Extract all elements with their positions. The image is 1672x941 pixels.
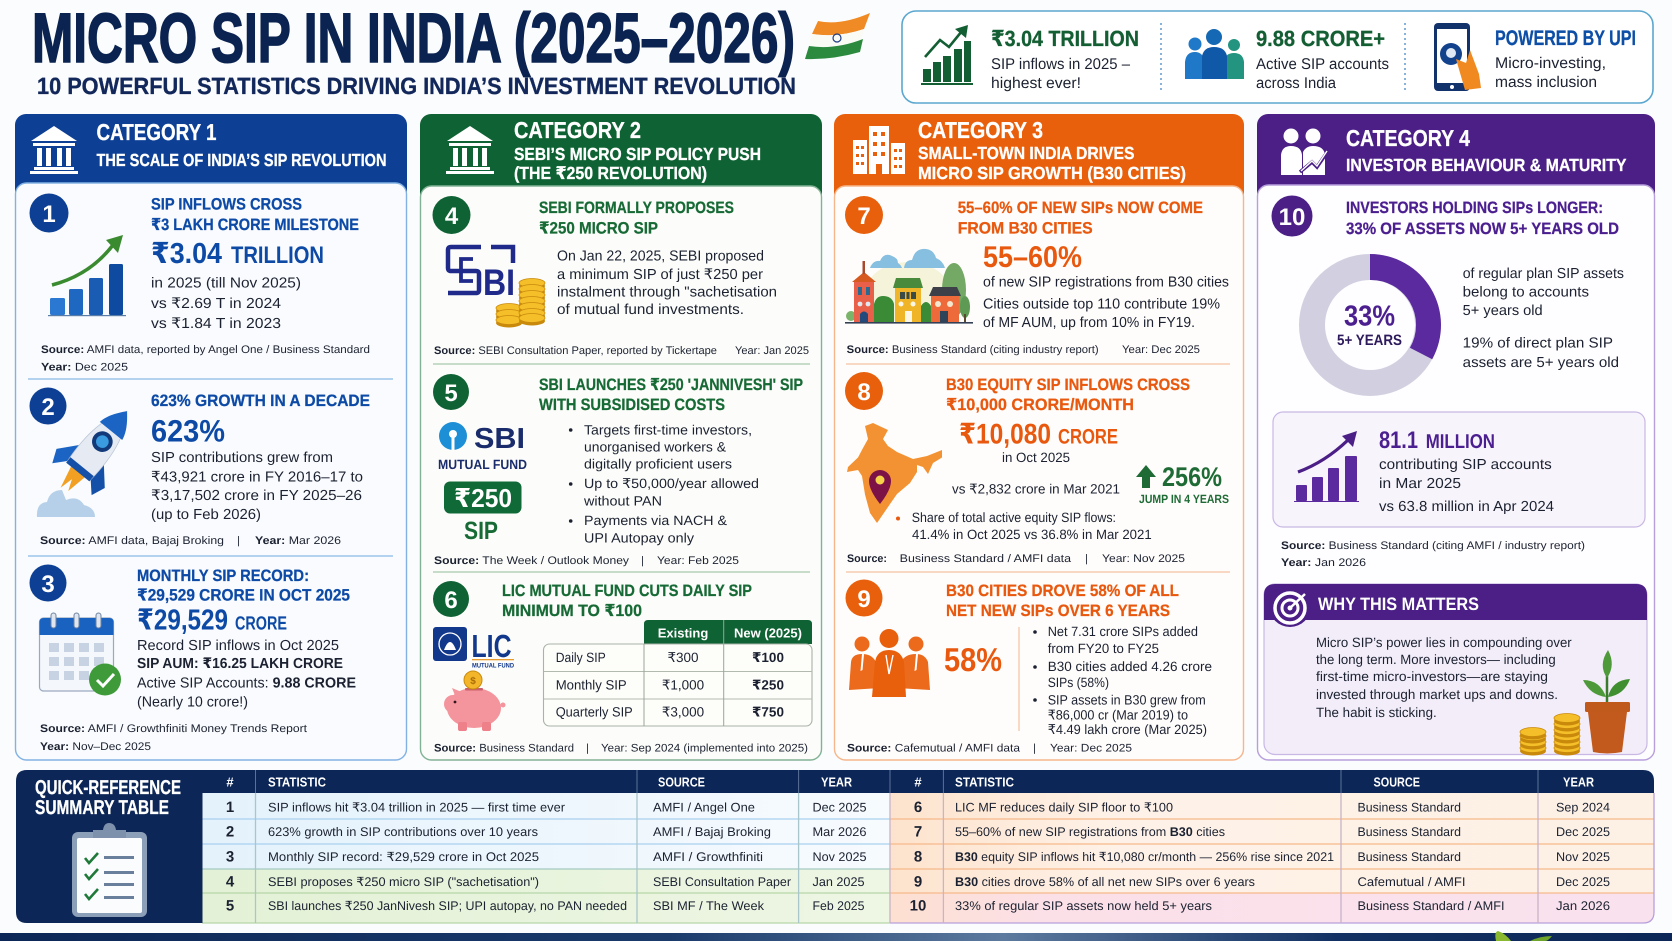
stat 6: LIC MUTUAL FUND CUTS DAILY SIP bbox=[502, 582, 752, 600]
category 2 header: (THE ₹250 REVOLUTION) bbox=[514, 163, 707, 183]
stat 3: 3 bbox=[41, 571, 55, 598]
card: contributing accounts: vs 63.8 million in Apr 2024 bbox=[1379, 499, 1554, 515]
icon: people group bbox=[1185, 29, 1244, 79]
rows 6 to 10: B30 cities drove 58% of all net new SIPs over 6 years bbox=[955, 875, 1255, 889]
stat 7: of new SIP registrations from B30 cities bbox=[983, 274, 1229, 290]
stat 8: CRORE bbox=[1058, 426, 1118, 448]
category 4 header: CATEGORY 4 bbox=[1346, 125, 1470, 151]
stat 8: | bbox=[1085, 553, 1088, 565]
stat: powered by UPI: Micro-investing, bbox=[1495, 55, 1606, 72]
category 4 header bbox=[1257, 114, 1655, 204]
stat: active accounts: across India bbox=[1256, 75, 1336, 92]
stat 8: vs ₹2,832 crore in Mar 2021 bbox=[952, 482, 1120, 496]
icon: piggy bank bbox=[444, 671, 506, 731]
stat 3: Source: AMFI / Growthfiniti Money Trends Report bbox=[40, 723, 307, 735]
rows 6 to 10: 6 bbox=[914, 799, 922, 816]
stat 7: Cities outside top 110 contribute 19% bbox=[983, 296, 1220, 312]
rows 1 to 5: 3 bbox=[226, 848, 234, 866]
stat 10: 10 bbox=[1279, 204, 1305, 231]
stat 2: Source: AMFI data, Bajaj Broking bbox=[40, 535, 224, 547]
bullet list: SIPs (58%) bbox=[1048, 675, 1109, 690]
stat 2: SIP contributions grew from bbox=[151, 450, 333, 466]
stat 1 bbox=[30, 194, 370, 374]
bullet list: Net 7.31 crore SIPs added bbox=[1048, 624, 1198, 639]
stat 6: | bbox=[586, 742, 589, 754]
stat 4: SEBI FORMALLY PROPOSES bbox=[539, 199, 734, 217]
icon: SEBI logo with coins: BI bbox=[483, 262, 515, 303]
donut chart: 33%: 33% bbox=[1344, 300, 1395, 332]
stat 5: SBI LAUNCHES ₹250 'JANNIVESH' SIP bbox=[539, 376, 803, 394]
rows 1 to 5: Mar 2026 bbox=[812, 825, 867, 839]
donut description: of regular plan SIP assets bbox=[1463, 266, 1624, 282]
subtitle: 10 POWERFUL STATISTICS DRIVING INDIA’S INVESTMENT REVOLUTION bbox=[37, 73, 796, 99]
stat 10: Year: Jan 2026 bbox=[1281, 557, 1366, 569]
stat 4: ₹250 MICRO SIP bbox=[539, 220, 658, 238]
callout: why this matters: invested through market ups and downs. bbox=[1316, 687, 1558, 702]
stat 8: in Oct 2025 bbox=[1002, 450, 1070, 465]
icon: target bbox=[1269, 585, 1311, 627]
icon: SEBI logo with coins bbox=[448, 247, 545, 328]
stat 4 bbox=[432, 196, 809, 357]
stat 9: | bbox=[1033, 742, 1036, 754]
icon: SBI mutual fund logo: SBI bbox=[474, 423, 525, 455]
stat 2: 623% bbox=[151, 414, 225, 448]
stat 7: 55–60% bbox=[983, 241, 1082, 274]
bullet list: B30 cities added 4.26 crore bbox=[1048, 659, 1212, 674]
icon: bank bbox=[30, 126, 78, 174]
stat 9: NET NEW SIPs OVER 6 YEARS bbox=[946, 602, 1170, 620]
rows 6 to 10: Business Standard bbox=[1358, 825, 1461, 839]
stat 6: Source: Business Standard bbox=[434, 742, 574, 754]
bullet list: without PAN bbox=[583, 494, 662, 508]
stat 8: 41.4% in Oct 2025 vs 36.8% in Mar 2021 bbox=[912, 527, 1152, 542]
bullet list bbox=[1033, 624, 1212, 737]
donut description: 19% of direct plan SIP bbox=[1463, 336, 1613, 352]
donut description: assets are 5+ years old bbox=[1463, 355, 1619, 371]
stat 8: Year: Nov 2025 bbox=[1102, 553, 1185, 565]
donut chart: 33% bbox=[1312, 254, 1441, 383]
stat 1: ₹3 LAKH CRORE MILESTONE bbox=[151, 216, 359, 234]
rows 6 to 10: Cafemutual / AMFI bbox=[1358, 875, 1466, 889]
stat 9: 58% bbox=[944, 641, 1002, 678]
stat 5: Year: Feb 2025 bbox=[657, 555, 739, 567]
stat 8: ₹10,000 CRORE/MONTH bbox=[946, 396, 1134, 414]
stat 3: Record SIP inflows in Oct 2025 bbox=[137, 638, 339, 654]
icon: plant in pot bbox=[1583, 650, 1630, 754]
stat 3: ₹29,529 bbox=[137, 604, 228, 636]
icon: calendar with check bbox=[40, 613, 121, 696]
rows 1 to 5: AMFI / Bajaj Broking bbox=[653, 825, 771, 839]
rows 1 to 5: Feb 2025 bbox=[812, 899, 865, 913]
stat: SIP inflows: ₹3.04 TRILLION bbox=[991, 26, 1139, 51]
table: LIC minimum amounts: ₹1,000 bbox=[662, 678, 704, 692]
category 1 header: CATEGORY 1 bbox=[96, 119, 217, 145]
stat 3: MONTHLY SIP RECORD: bbox=[137, 567, 309, 585]
rows 6 to 10: 9 bbox=[914, 874, 922, 890]
stat 3: Active SIP Accounts: 9.88 CRORE bbox=[137, 676, 356, 692]
table: LIC minimum amounts: ₹100 bbox=[752, 650, 784, 665]
bullet list bbox=[569, 422, 759, 546]
stat 2: 623% GROWTH IN A DECADE bbox=[151, 392, 370, 410]
callout: why this matters: the long term. More investors— including bbox=[1316, 652, 1556, 667]
icon: piggy bank: $ bbox=[470, 676, 476, 687]
stat 8: ₹10,080 bbox=[959, 418, 1051, 450]
rows 6 to 10: Nov 2025 bbox=[1556, 850, 1610, 864]
rows 1 to 5: Dec 2025 bbox=[812, 800, 867, 814]
stat 5: 5 bbox=[444, 380, 458, 407]
stat 7: 7 bbox=[857, 203, 871, 230]
bullet list: UPI Autopay only bbox=[584, 530, 694, 546]
icon: SBI mutual fund logo bbox=[438, 422, 527, 472]
card: contributing accounts bbox=[1273, 412, 1645, 527]
stat 4: Year: Jan 2025 bbox=[735, 345, 809, 357]
stat 7: 55–60% OF NEW SIPs NOW COME bbox=[958, 199, 1203, 217]
bullet list: ₹86,000 cr (Mar 2019) to bbox=[1048, 708, 1188, 722]
stat 10: Source: Business Standard (citing AMFI / industry report) bbox=[1281, 540, 1585, 552]
category 2 body bbox=[420, 186, 822, 760]
stat 1: in 2025 (till Nov 2025) bbox=[151, 276, 301, 292]
rows 1 to 5: Nov 2025 bbox=[812, 850, 867, 864]
header labels: # bbox=[226, 774, 234, 790]
title: MICRO SIP IN INDIA (2025–2026) bbox=[32, 0, 795, 77]
table: LIC minimum amounts: ₹3,000 bbox=[662, 704, 704, 720]
callout: 256% jump: JUMP IN 4 YEARS bbox=[1139, 492, 1229, 506]
icon: LIC logo bbox=[433, 627, 514, 670]
category 2 header: CATEGORY 2 bbox=[514, 117, 641, 143]
stat 5: | bbox=[641, 555, 644, 567]
header labels: # bbox=[914, 774, 922, 790]
rows 6 to 10: Dec 2025 bbox=[1556, 825, 1610, 839]
rows 1 to 5: 1 bbox=[226, 799, 234, 816]
category 3 header: SMALL-TOWN INDIA DRIVES bbox=[918, 143, 1134, 163]
stat 9 bbox=[846, 580, 1212, 754]
quick reference left block: QUICK-REFERENCE bbox=[35, 777, 181, 799]
badge: 250 SIP bbox=[444, 482, 522, 545]
rows 1 to 5: AMFI / Angel One bbox=[653, 800, 755, 814]
stat 1: Source: AMFI data, reported by Angel One / Business Standard bbox=[41, 344, 370, 356]
rows 1 to 5: SBI launches ₹250 JanNivesh SIP; UPI autopay, no PAN needed bbox=[268, 899, 627, 913]
category 1 header: THE SCALE OF INDIA’S SIP REVOLUTION bbox=[96, 150, 386, 170]
stat 2: ₹43,921 crore in FY 2016–17 to bbox=[151, 470, 363, 486]
icon: small town illustration bbox=[845, 249, 973, 324]
donut chart: 33%: 5+ YEARS bbox=[1337, 332, 1402, 349]
table: LIC minimum amounts bbox=[544, 620, 812, 726]
stat 6: Year: Sep 2024 (implemented into 2025) bbox=[601, 742, 808, 754]
category 3 header: MICRO SIP GROWTH (B30 CITIES) bbox=[918, 163, 1186, 183]
icon: phone with UPI bbox=[1434, 23, 1481, 91]
icon: investors with rising chart bbox=[1281, 128, 1328, 175]
stat: active accounts bbox=[1256, 26, 1389, 92]
table: LIC minimum amounts: Quarterly SIP bbox=[556, 704, 633, 720]
category 4 header: INVESTOR BEHAVIOUR & MATURITY bbox=[1346, 155, 1627, 175]
icon: India flag bbox=[805, 13, 870, 59]
category 3 header: CATEGORY 3 bbox=[918, 117, 1043, 143]
icon: coins bbox=[1520, 714, 1580, 756]
stat 3: Year: Nov–Dec 2025 bbox=[40, 741, 151, 753]
stat 3: (Nearly 10 crore!) bbox=[137, 694, 248, 710]
icon: LIC logo: MUTUAL FUND bbox=[472, 662, 514, 670]
rows 1 to 5: AMFI / Growthfiniti bbox=[653, 850, 763, 864]
stat 10 bbox=[1272, 196, 1645, 569]
rows 1 to 5 bbox=[226, 799, 867, 914]
bullet list: from FY20 to FY25 bbox=[1048, 641, 1159, 656]
stat 8: Share of total active equity SIP flows: bbox=[912, 510, 1116, 525]
stat 4: instalment through "sachetisation bbox=[557, 284, 777, 300]
panel: top key stats bbox=[902, 11, 1653, 103]
stat 2: | bbox=[237, 535, 240, 547]
stat: active accounts: 9.88 CRORE+ bbox=[1256, 26, 1385, 51]
stat 4: 4 bbox=[445, 203, 459, 230]
rows 6 to 10: 8 bbox=[914, 848, 922, 866]
stat 1: 1 bbox=[42, 201, 56, 228]
bullet list: Targets first-time investors, bbox=[584, 422, 752, 438]
panel: quick-reference summary table bbox=[16, 770, 1654, 923]
icon: bar chart with arrow bbox=[48, 235, 126, 316]
stat 8: 8 bbox=[857, 379, 871, 406]
header labels: YEAR bbox=[1563, 774, 1595, 790]
bullet list: ₹4.49 lakh crore (Mar 2025) bbox=[1048, 722, 1207, 737]
category 2 header bbox=[420, 114, 822, 204]
badge: 250 SIP: ₹250 bbox=[454, 483, 512, 513]
rows 6 to 10: LIC MF reduces daily SIP floor to ₹100 bbox=[955, 800, 1173, 814]
quick reference left block: SUMMARY TABLE bbox=[35, 797, 169, 819]
stat 9: Source: Cafemutual / AMFI data bbox=[847, 742, 1021, 754]
donut description: 5+ years old bbox=[1463, 303, 1543, 319]
rows 1 to 5: SIP inflows hit ₹3.04 trillion in 2025 — first time ever bbox=[268, 800, 565, 814]
icon: city buildings bbox=[853, 126, 905, 174]
rows 1 to 5: Jan 2025 bbox=[812, 875, 865, 889]
bullet list: digitally proficient users bbox=[584, 456, 732, 472]
stat 10: INVESTORS HOLDING SIPs LONGER: bbox=[1346, 199, 1603, 217]
stat 5 bbox=[433, 374, 803, 567]
category 3 body bbox=[834, 186, 1244, 760]
stat 1: SIP INFLOWS CROSS bbox=[151, 196, 302, 214]
stat 6 bbox=[433, 581, 812, 754]
stat 2 bbox=[30, 388, 370, 547]
stat 5: Source: The Week / Outlook Money bbox=[434, 555, 630, 567]
stat 10: 33% OF ASSETS NOW 5+ YEARS OLD bbox=[1346, 220, 1619, 238]
card: contributing accounts: in Mar 2025 bbox=[1379, 476, 1461, 492]
icon: purple growth chart bbox=[1294, 431, 1359, 502]
stat: SIP inflows bbox=[991, 26, 1139, 92]
stat 7: FROM B30 CITIES bbox=[958, 220, 1093, 238]
category 2 header: SEBI’S MICRO SIP POLICY PUSH bbox=[514, 144, 761, 164]
rows 6 to 10: Jan 2026 bbox=[1556, 899, 1610, 913]
stat 4: of mutual fund investments. bbox=[557, 302, 744, 318]
rows 6 to 10: 10 bbox=[910, 898, 926, 914]
category 3 header bbox=[834, 114, 1244, 204]
stat 6: MINIMUM TO ₹100 bbox=[502, 602, 642, 620]
table: LIC minimum amounts: New (2025) bbox=[734, 626, 802, 640]
icon: LIC logo: LIC bbox=[472, 628, 512, 664]
stat 1: ₹3.04 bbox=[151, 238, 222, 270]
bullet list: Up to ₹50,000/year allowed bbox=[584, 476, 759, 491]
stat 2: (up to Feb 2026) bbox=[151, 507, 261, 523]
stat 3: SIP AUM: ₹16.25 LAKH CRORE bbox=[137, 656, 343, 672]
panel: category 2 bbox=[420, 114, 822, 760]
stat 6: 6 bbox=[444, 587, 458, 614]
quick reference left block bbox=[16, 770, 202, 923]
stat 7: of MF AUM, up from 10% in FY19. bbox=[983, 315, 1195, 331]
table: LIC minimum amounts: ₹250 bbox=[752, 678, 784, 692]
panel: category 3 bbox=[834, 114, 1244, 760]
header labels bbox=[226, 770, 1595, 793]
category 1 body bbox=[16, 183, 406, 760]
stat 3 bbox=[30, 564, 356, 753]
stat 2: 2 bbox=[41, 394, 55, 421]
stat 4: Source: SEBI Consultation Paper, reported by Tickertape bbox=[434, 345, 717, 357]
stat 2: Year: Mar 2026 bbox=[255, 535, 341, 547]
stat 8 bbox=[845, 372, 1229, 565]
icon: bank bbox=[446, 126, 494, 174]
stat 7: Year: Dec 2025 bbox=[1122, 344, 1200, 356]
callout: 256% jump: 256% bbox=[1162, 462, 1222, 492]
donut description: belong to accounts bbox=[1463, 284, 1589, 300]
stat 1: Year: Dec 2025 bbox=[41, 362, 128, 374]
row backgrounds bbox=[202, 793, 1654, 923]
rows 6 to 10: Dec 2025 bbox=[1556, 875, 1610, 889]
card: contributing accounts: 81.1 bbox=[1379, 427, 1418, 454]
icon: clipboard checklist bbox=[72, 823, 147, 917]
category 1 header bbox=[15, 114, 407, 204]
rows 1 to 5: 5 bbox=[226, 898, 234, 914]
panel: category 4 bbox=[1257, 114, 1655, 760]
stat 9: B30 CITIES DROVE 58% OF ALL bbox=[946, 582, 1179, 600]
callout: why this matters: Micro SIP’s power lies in compounding over bbox=[1316, 635, 1572, 650]
rows 1 to 5: 2 bbox=[226, 824, 234, 840]
callout: why this matters: first-time micro-investors—are staying bbox=[1316, 669, 1548, 684]
stat 4: a minimum SIP of just ₹250 per bbox=[557, 267, 763, 283]
rows 1 to 5: Monthly SIP record: ₹29,529 crore in Oct 2025 bbox=[268, 850, 539, 864]
stat 3: CRORE bbox=[235, 614, 287, 634]
bottom band bbox=[0, 931, 1672, 941]
row lines bbox=[202, 793, 1654, 923]
stat 1: TRILLION bbox=[231, 242, 324, 269]
icon: group of people bbox=[849, 629, 930, 697]
header labels: STATISTIC bbox=[268, 774, 327, 790]
stat: powered by UPI: mass inclusion bbox=[1495, 74, 1597, 91]
stat 5: WITH SUBSIDISED COSTS bbox=[539, 396, 725, 414]
icon: rocket bbox=[37, 392, 151, 517]
bullet list: unorganised workers & bbox=[584, 440, 726, 454]
callout: why this matters bbox=[1264, 584, 1647, 756]
stat 8: Business Standard / AMFI data bbox=[900, 553, 1072, 565]
card: contributing accounts: contributing SIP accounts bbox=[1379, 457, 1552, 473]
rows 1 to 5: SBI MF / The Week bbox=[653, 899, 765, 913]
card: contributing accounts: MILLION bbox=[1426, 431, 1495, 453]
rows 1 to 5: 4 bbox=[226, 874, 235, 890]
header labels: SOURCE bbox=[658, 774, 705, 790]
rows 6 to 10: B30 equity SIP inflows hit ₹10,080 cr/month — 256% rise since 2021 bbox=[955, 850, 1334, 864]
table: LIC minimum amounts: Existing bbox=[658, 626, 708, 640]
rows 6 to 10: 7 bbox=[914, 824, 922, 840]
stat 1: vs ₹2.69 T in 2024 bbox=[151, 296, 281, 312]
stat 8: B30 EQUITY SIP INFLOWS CROSS bbox=[946, 376, 1190, 394]
stat 1: vs ₹1.84 T in 2023 bbox=[151, 316, 281, 332]
bullet list: Payments via NACH & bbox=[584, 513, 727, 528]
rows 1 to 5: SEBI proposes ₹250 micro SIP ("sachetisation") bbox=[268, 875, 539, 889]
rows 6 to 10: Sep 2024 bbox=[1556, 800, 1610, 814]
header labels: SOURCE bbox=[1374, 774, 1420, 790]
icon: SBI mutual fund logo: MUTUAL FUND bbox=[438, 457, 527, 472]
icon: green growth chart bbox=[921, 25, 973, 85]
table: LIC minimum amounts: Monthly SIP bbox=[556, 678, 627, 692]
callout: why this matters: The habit is sticking. bbox=[1316, 705, 1437, 720]
stat 3: ₹29,529 CRORE IN OCT 2025 bbox=[137, 586, 350, 604]
table: LIC minimum amounts: ₹300 bbox=[667, 650, 699, 665]
rows 1 to 5: SEBI Consultation Paper bbox=[653, 875, 791, 889]
callout: 256% jump bbox=[1136, 462, 1229, 506]
stat: powered by UPI bbox=[1495, 27, 1636, 91]
stat: SIP inflows: highest ever! bbox=[991, 75, 1081, 92]
header labels: STATISTIC bbox=[955, 774, 1015, 790]
callout: why this matters: WHY THIS MATTERS bbox=[1318, 594, 1479, 614]
rows 1 to 5: 623% growth in SIP contributions over 10 years bbox=[268, 825, 538, 839]
table header bar bbox=[190, 770, 1654, 793]
stat: SIP inflows: SIP inflows in 2025 – bbox=[991, 56, 1130, 73]
stat 7 bbox=[845, 196, 1229, 356]
bullet list: SIP assets in B30 grew from bbox=[1048, 692, 1206, 708]
panel: category 1 bbox=[15, 114, 407, 760]
table: LIC minimum amounts: Daily SIP bbox=[556, 650, 606, 665]
category 4 body bbox=[1258, 185, 1654, 760]
icon: India map with pin bbox=[847, 423, 942, 523]
stat 7: Source: Business Standard (citing industry report) bbox=[847, 344, 1099, 356]
rows 6 to 10: 33% of regular SIP assets now held 5+ years bbox=[955, 899, 1212, 913]
rows 6 to 10: Business Standard bbox=[1358, 850, 1461, 864]
stat 8: Source: bbox=[847, 553, 887, 565]
rows 6 to 10 bbox=[910, 799, 1610, 914]
table: LIC minimum amounts: ₹750 bbox=[752, 704, 784, 720]
badge: 250 SIP: SIP bbox=[464, 517, 498, 545]
rows 6 to 10: Business Standard / AMFI bbox=[1358, 899, 1504, 913]
rows 6 to 10: 55–60% of new SIP registrations from B30 cities bbox=[955, 825, 1225, 839]
donut description bbox=[1463, 266, 1624, 371]
stat 2: ₹3,17,502 crore in FY 2025–26 bbox=[151, 488, 362, 504]
stat 9: 9 bbox=[857, 586, 871, 613]
stat 4: On Jan 22, 2025, SEBI proposed bbox=[557, 248, 764, 264]
stat: active accounts: Active SIP accounts bbox=[1256, 56, 1389, 73]
stat 9: Year: Dec 2025 bbox=[1050, 742, 1132, 754]
rows 6 to 10: Business Standard bbox=[1358, 800, 1461, 814]
header labels: YEAR bbox=[821, 774, 853, 790]
